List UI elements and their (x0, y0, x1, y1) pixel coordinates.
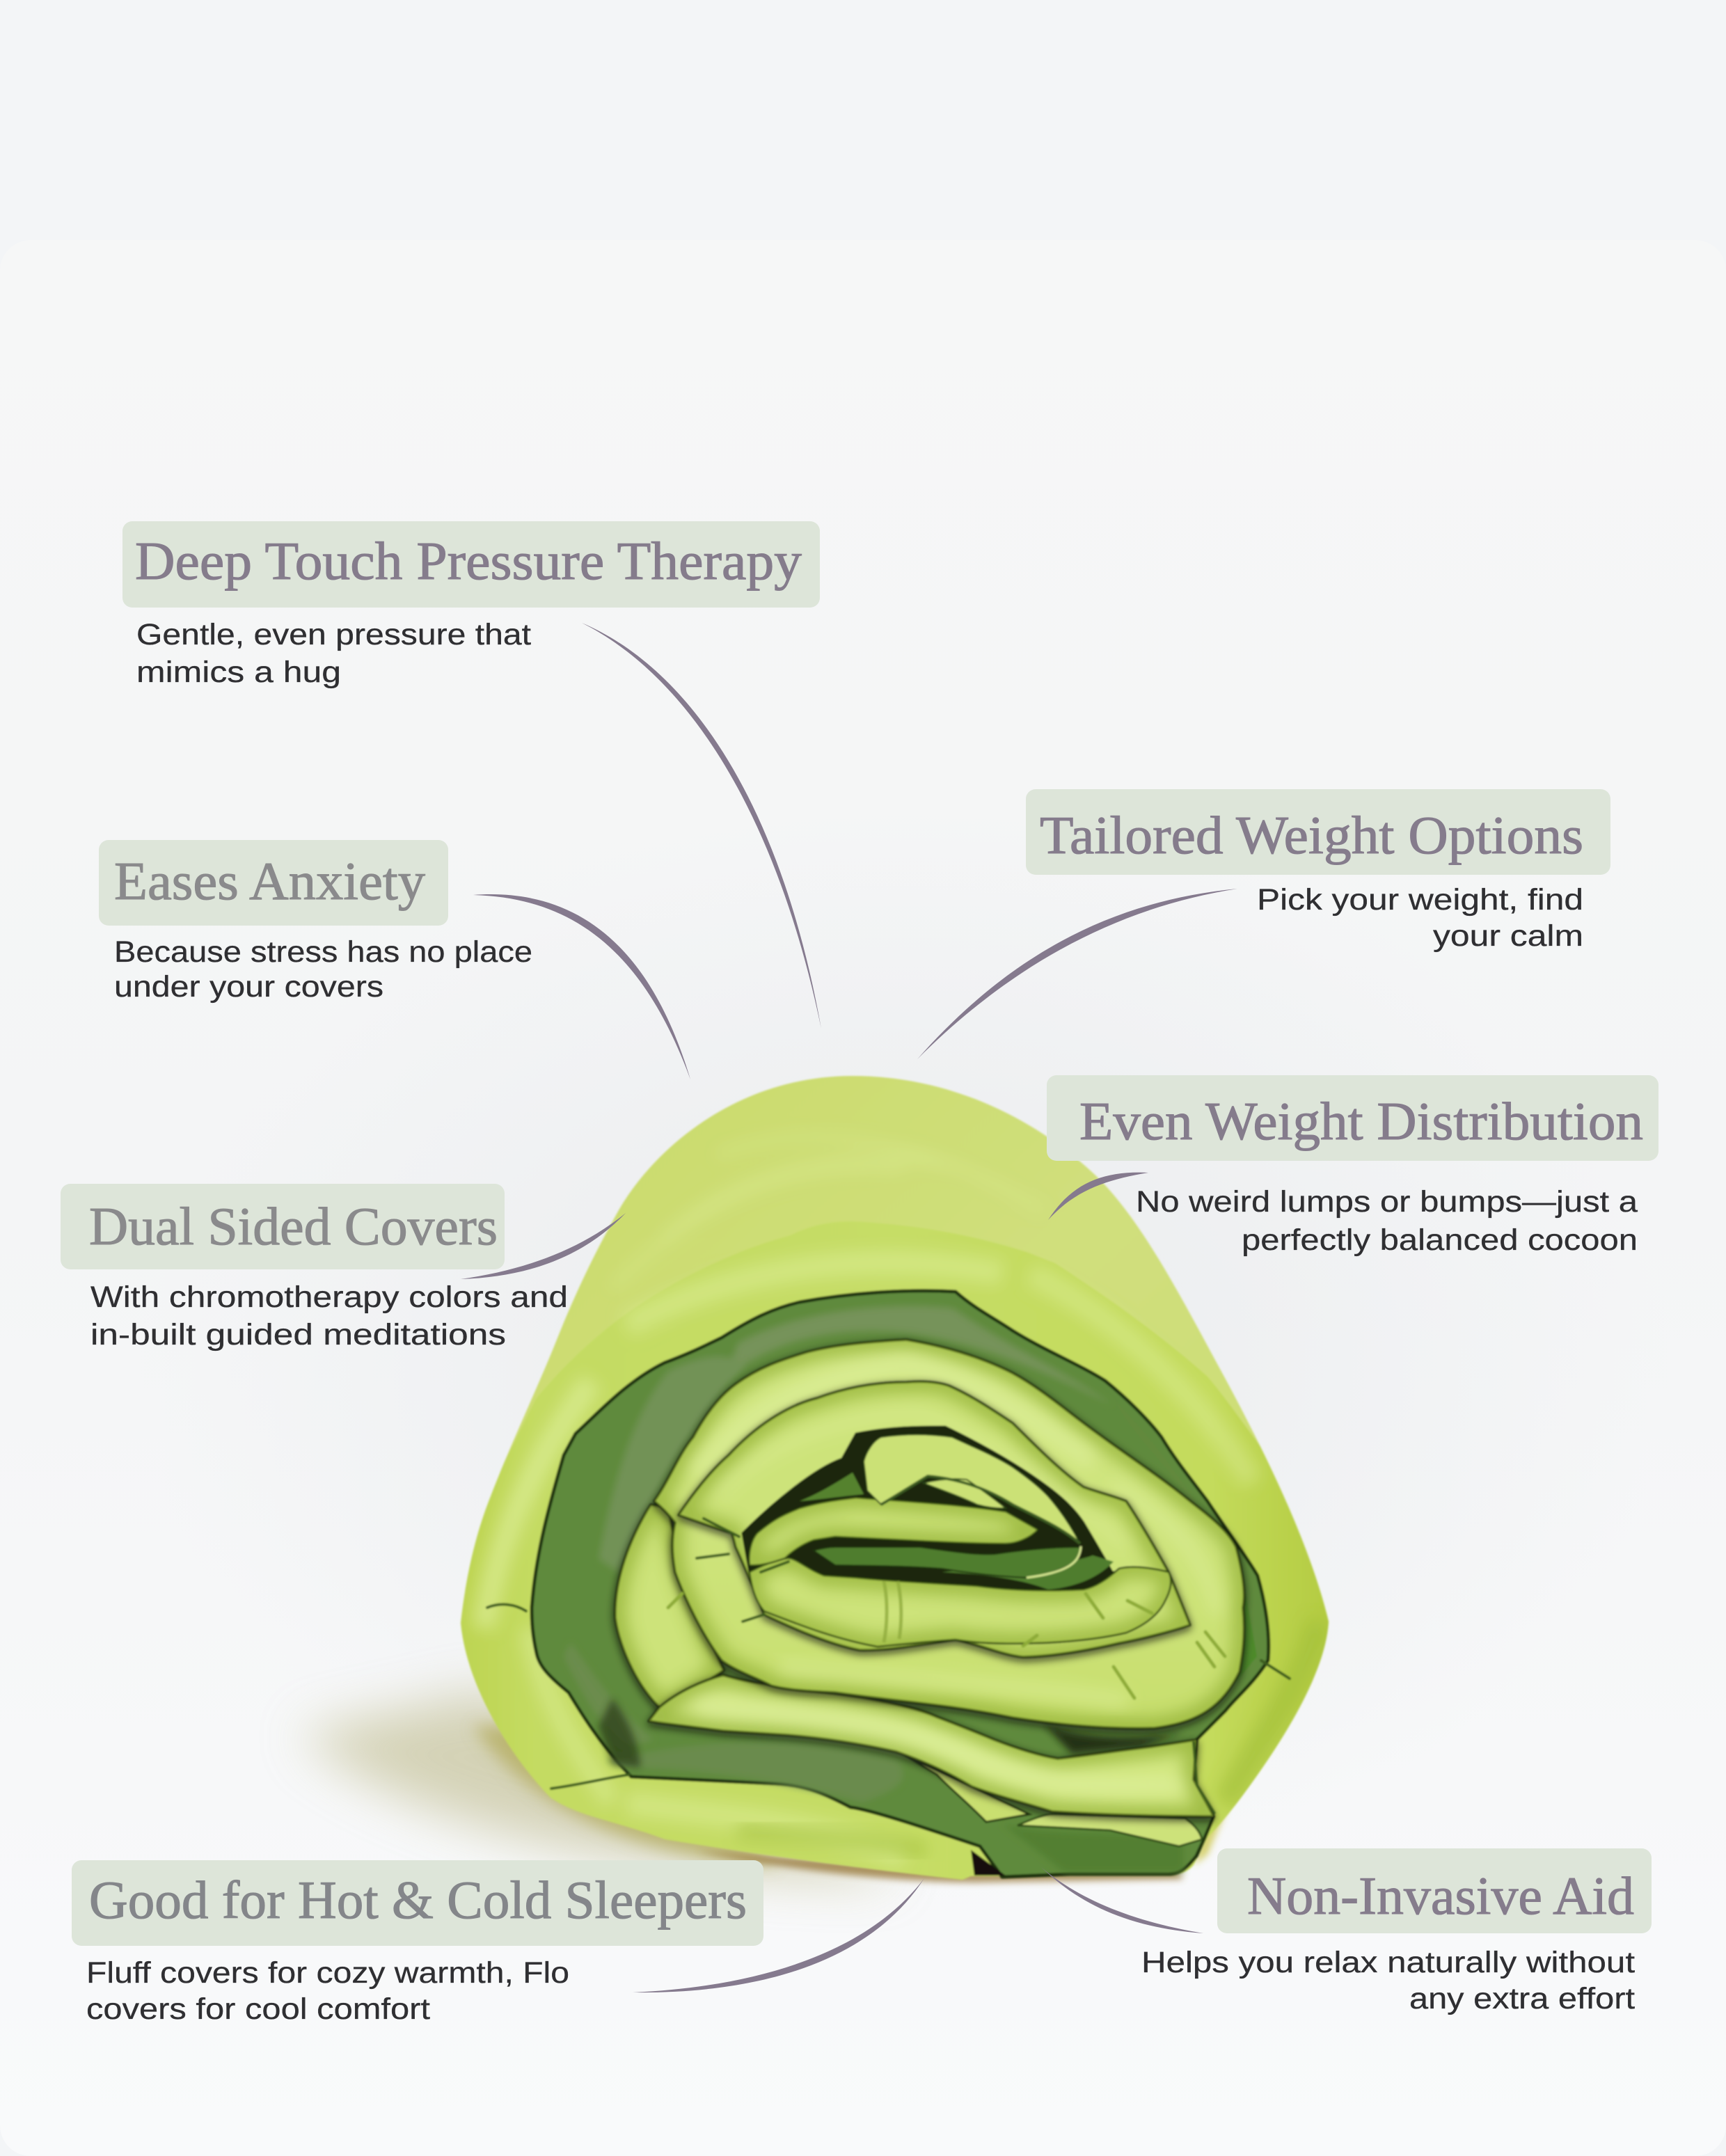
green patch left of flap (800, 1473, 864, 1501)
callout: Even Weight Distribution (1047, 1075, 1658, 1257)
callout: Deep Touch Pressure Therapy (122, 521, 821, 1029)
outer front ring (445, 1137, 1343, 1893)
callout: Non-Invasive Aid (1041, 1848, 1652, 2015)
description: covers for cool comfort (86, 1992, 430, 2026)
heading text: Dual Sided Covers (89, 1196, 498, 1256)
centre flap (864, 1434, 1080, 1544)
connector curve (473, 894, 690, 1079)
description: Helps you relax naturally without (1141, 1946, 1635, 1979)
description: under your covers (114, 970, 383, 1004)
description: No weird lumps or bumps—just a (1136, 1185, 1638, 1219)
description: perfectly balanced cocoon (1242, 1223, 1638, 1257)
description: Pick your weight, find (1257, 883, 1583, 917)
bottom right bright fold (1018, 1814, 1202, 1846)
description: in-built guided meditations (90, 1318, 506, 1352)
heading pill (1047, 1075, 1658, 1161)
heading pill (99, 840, 448, 926)
description: With chromotherapy colors and (90, 1281, 568, 1314)
sheer lining highlights (564, 1306, 1257, 1876)
description: Because stress has no place (114, 935, 532, 969)
heading text: Tailored Weight Options (1040, 805, 1583, 865)
description: mimics a hug (136, 656, 341, 689)
heading pill (1217, 1848, 1652, 1933)
inner flap sheen (924, 1479, 1006, 1508)
description: Fluff covers for cozy warmth, Flo (86, 1956, 569, 1990)
heading text: Even Weight Distribution (1079, 1091, 1643, 1151)
heading pill (72, 1860, 763, 1946)
connector curve (582, 623, 821, 1029)
heading pill (61, 1184, 505, 1269)
callout: Tailored Weight Options (917, 789, 1610, 1059)
connector curve (461, 1213, 626, 1279)
heading text: Non-Invasive Aid (1247, 1866, 1634, 1926)
blanket illustration (445, 1076, 1343, 1893)
heading pill (122, 521, 820, 608)
description: your calm (1433, 919, 1583, 953)
callout: Dual Sided Covers (61, 1184, 626, 1352)
inner upper coil (750, 1498, 1038, 1565)
callout: Eases Anxiety (99, 840, 690, 1079)
spiral loop A (654, 1340, 1244, 1728)
soft grey backdrop around blanket (139, 814, 1670, 1900)
heading pill (1026, 789, 1610, 875)
connector curve (917, 889, 1237, 1059)
inner lower coil (750, 1558, 1171, 1647)
soft puckers (668, 1594, 1225, 1698)
heading text: Eases Anxiety (114, 851, 426, 911)
lower bright band (649, 1675, 1214, 1816)
description: any extra effort (1409, 1982, 1635, 2015)
left strip (615, 1505, 724, 1709)
spiral loop B (679, 1381, 1190, 1657)
heading text: Good for Hot & Cold Sleepers (89, 1870, 747, 1930)
spiral eye dark green (814, 1547, 1080, 1578)
description: Gentle, even pressure that (136, 618, 531, 651)
ground shadow (299, 1691, 1226, 1882)
heading text: Deep Touch Pressure Therapy (135, 531, 802, 591)
rolled blanket tube (461, 1076, 1329, 1880)
inner lower green fold (942, 1555, 1114, 1590)
inner dark green lining (532, 1291, 1269, 1877)
connector curve (1041, 1867, 1203, 1933)
connector curve (633, 1878, 924, 1992)
triangular fold (902, 1754, 1029, 1822)
connector curve (1048, 1173, 1148, 1220)
callout: Good for Hot and Cold Sleepers (72, 1860, 924, 2026)
spiral hollow (743, 1427, 1169, 1640)
fold creases (487, 1519, 1290, 1813)
